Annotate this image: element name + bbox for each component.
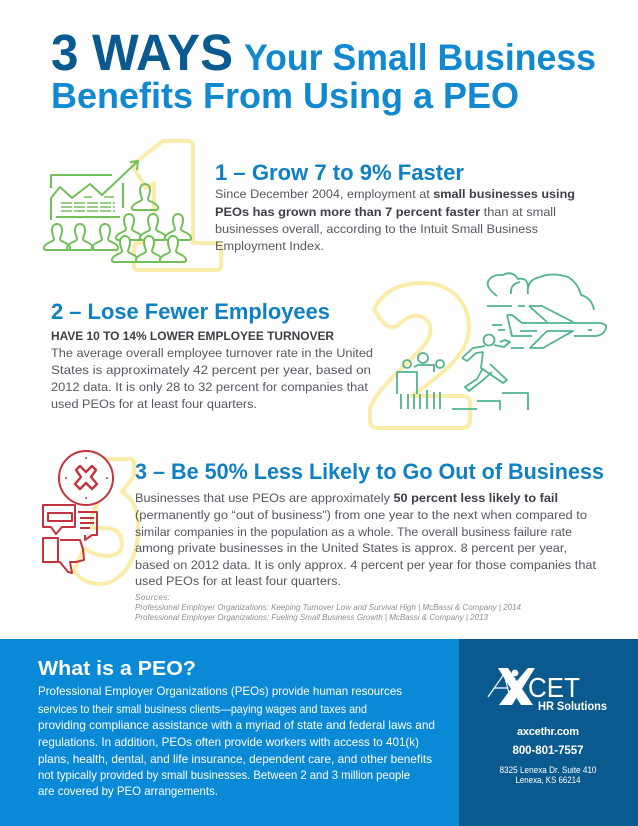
numeral 1 outline bbox=[132, 141, 221, 270]
contact details bbox=[500, 726, 596, 785]
panel: what is a PEO: regulations. In addition, PEOs often provide workers with access to 401(k) bbox=[38, 736, 419, 749]
panel: what is a PEO: Professional Employer Organizations (PEOs) provide human resources bbox=[38, 685, 402, 698]
section 2 text bbox=[51, 299, 373, 411]
section 1 text: PEOs has grown more than 7 percent faster than at small bbox=[215, 205, 556, 219]
contact details: 8325 Lenexa Dr. Suite 410 bbox=[500, 765, 596, 775]
sources: Professional Employer Organizations: Keeping Turnover Low and Survival High | McBassi & Company | 2014 bbox=[135, 603, 522, 612]
contact details: axcethr.com bbox=[517, 726, 579, 738]
title: 3 WAYS bbox=[51, 24, 233, 81]
numeral 2 outline bbox=[370, 283, 470, 428]
section 2 text: used PEOs for at least four quarters. bbox=[51, 397, 257, 411]
section 1 text: Since December 2004, employment at small businesses using bbox=[215, 187, 575, 201]
logo: Axcet HR Solutions: CET bbox=[528, 672, 580, 703]
panel: what is a PEO bbox=[0, 639, 459, 826]
logo: Axcet HR Solutions: HR Solutions bbox=[538, 699, 607, 713]
section 2 text: HAVE 10 TO 14% LOWER EMPLOYEE TURNOVER bbox=[51, 329, 334, 343]
panel: what is a PEO: What is a PEO? bbox=[38, 658, 196, 680]
title: Your Small Business bbox=[244, 37, 596, 78]
section 3 text: used PEOs for at least four quarters. bbox=[135, 574, 341, 588]
section 3 text: Businesses that use PEOs are approximately 50 percent less likely to fail bbox=[135, 491, 558, 505]
section 1 text: businesses overall, according to the Intuit Small Business bbox=[215, 222, 538, 236]
contact details: Lenexa, KS 66214 bbox=[516, 775, 580, 785]
section 1 text bbox=[215, 160, 575, 253]
section 2 text: States is approximately 42 percent per year, based on bbox=[51, 363, 371, 377]
title: Benefits From Using a PEO bbox=[51, 75, 519, 116]
section 1 text: 1 – Grow 7 to 9% Faster bbox=[215, 160, 464, 185]
contact details: 800-801-7557 bbox=[512, 745, 584, 757]
panel: what is a PEO: not typically provided by small businesses. Between 2 and 3 million people bbox=[38, 769, 410, 782]
section 2 text: 2012 data. It is only 28 to 32 percent for companies that bbox=[51, 380, 369, 394]
panel: contact bbox=[459, 639, 638, 826]
panel: what is a PEO: are covered by PEO arrangements. bbox=[38, 785, 218, 798]
title bbox=[51, 24, 596, 116]
section 3 text: (permanently go “out of business”) from one year to the next when compared to bbox=[135, 508, 587, 522]
section 3 text: similar companies in the population as a whole. The overall business failure rate bbox=[135, 525, 572, 539]
numeral 3 outline bbox=[74, 459, 138, 584]
section 1 text: Employment Index. bbox=[215, 239, 324, 253]
sources: Professional Employer Organizations: Fueling Small Business Growth | McBassi & Company | 2013 bbox=[135, 613, 489, 622]
icon: failure cross, chat and thumbs down bbox=[43, 451, 113, 573]
logo: Axcet HR Solutions bbox=[488, 668, 607, 713]
icon: growth chart and people bbox=[44, 161, 191, 262]
section 3 text: based on 2012 data. It is only approx. 4 percent per year for those companies that bbox=[135, 558, 597, 572]
panel: what is a PEO: plans, health, dental, and life insurance, dependent care, and other benefits bbox=[38, 753, 432, 766]
sources bbox=[135, 593, 522, 622]
section 3 text bbox=[135, 459, 604, 588]
section 3 text: 3 – Be 50% Less Likely to Go Out of Business bbox=[135, 459, 604, 484]
section 2 text: 2 – Lose Fewer Employees bbox=[51, 299, 330, 324]
icon: meeting, runner and airplane bbox=[397, 273, 606, 410]
section 2 text: The average overall employee turnover rate in the United bbox=[51, 346, 373, 360]
panel: what is a PEO: services to their small business clients—paying wages and taxes and bbox=[38, 703, 367, 716]
section 3 text: among private businesses in the United States is approx. 8 percent per year, bbox=[135, 541, 567, 555]
panel: what is a PEO: providing compliance assistance with a myriad of state and federal laws and bbox=[38, 719, 435, 732]
sources: Sources: bbox=[135, 593, 170, 602]
